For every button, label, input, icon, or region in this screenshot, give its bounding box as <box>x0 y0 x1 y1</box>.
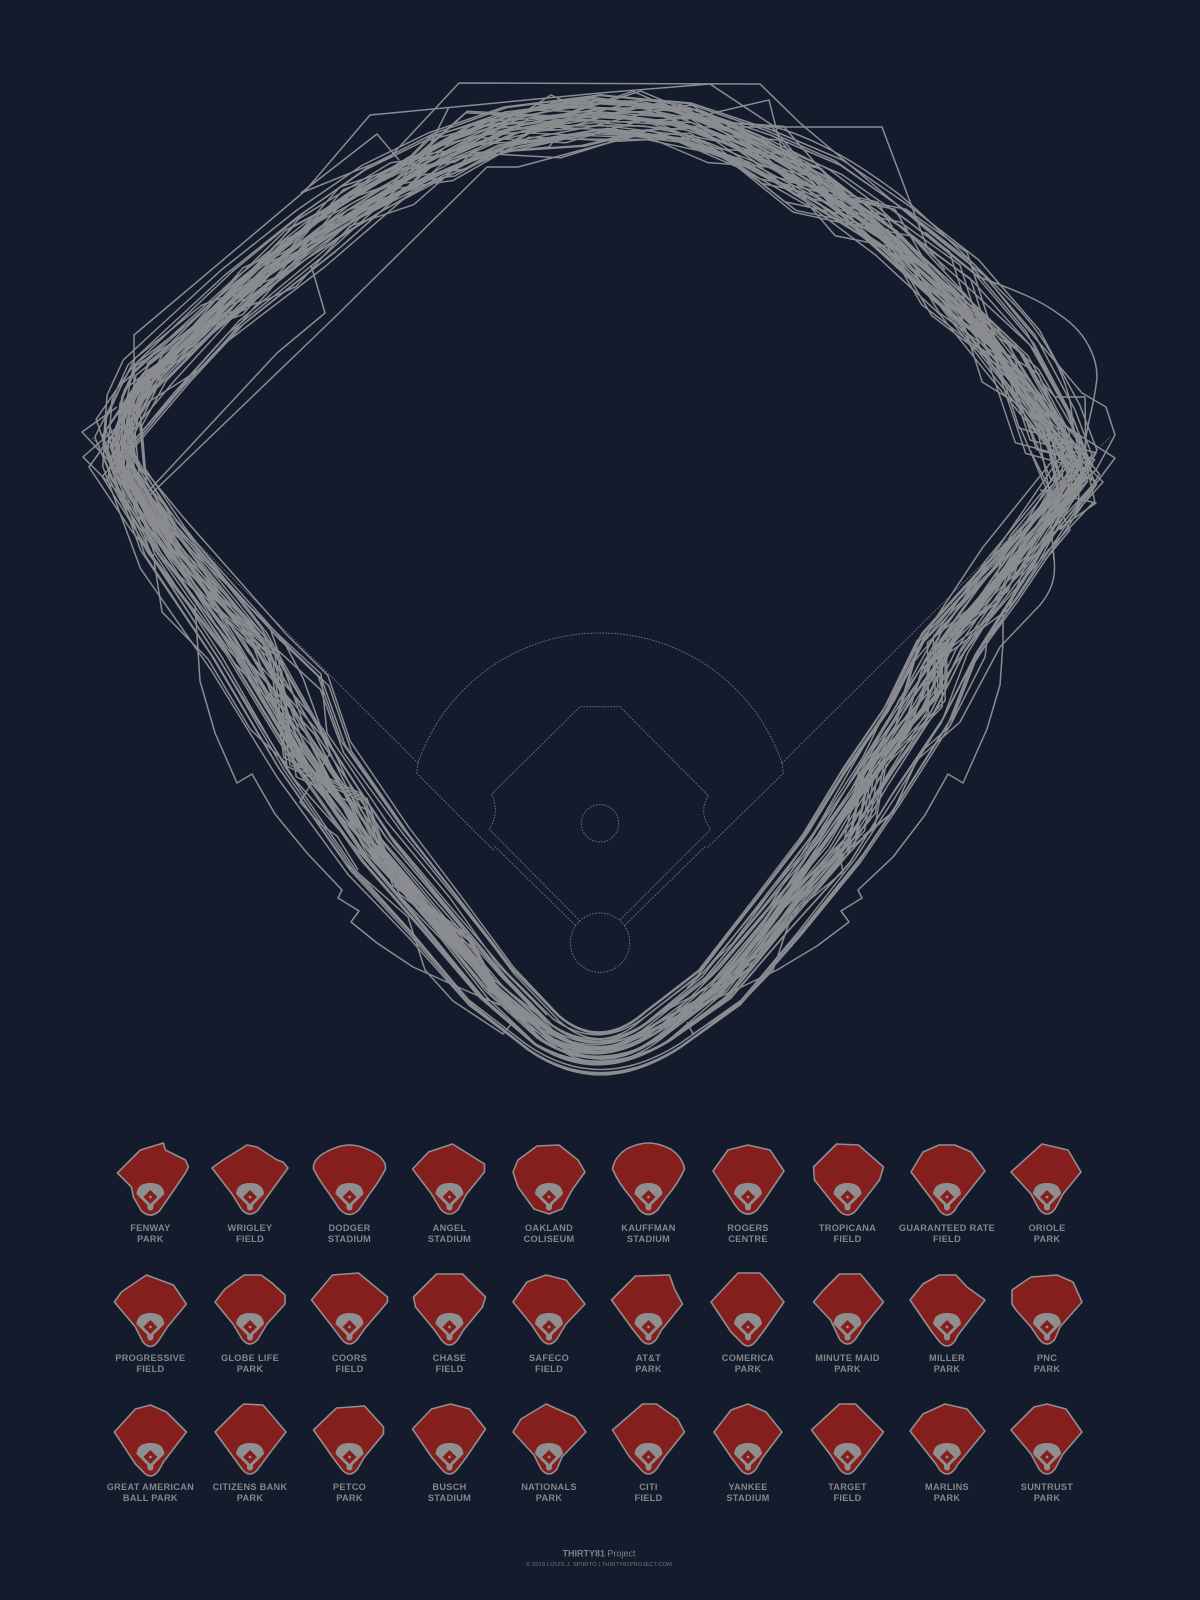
park: Wrigley Field <box>212 1145 288 1244</box>
park: Progressive Field: PROGRESSIVE <box>115 1353 185 1363</box>
park: Citizens Bank Park: CITIZENS BANK <box>213 1482 287 1492</box>
park: Yankee Stadium: YANKEE <box>728 1482 768 1492</box>
park: Guaranteed Rate Field <box>899 1145 995 1244</box>
park: Rogers Centre <box>713 1145 784 1244</box>
park: Chase Field <box>414 1274 486 1374</box>
park: Citi Field: CITI <box>639 1482 658 1492</box>
park: Coors Field: COORS <box>332 1353 367 1363</box>
park: SunTrust Park <box>1011 1404 1082 1503</box>
park: Citi Field <box>612 1404 684 1503</box>
park: Miller Park: PARK <box>934 1364 960 1374</box>
park: Nationals Park: PARK <box>536 1493 562 1503</box>
footer credit: THIRTY81 Project <box>562 1548 636 1558</box>
park: Tropicana Field: TROPICANA <box>819 1223 876 1233</box>
park: Kauffman Stadium <box>612 1143 684 1244</box>
park: Guaranteed Rate Field: FIELD <box>933 1234 961 1244</box>
park: Tropicana Field <box>814 1144 884 1244</box>
park: SunTrust Park: PARK <box>1034 1493 1060 1503</box>
park: Dodger Stadium: STADIUM <box>328 1234 371 1244</box>
park: Minute Maid Park: MINUTE MAID <box>815 1353 880 1363</box>
park: SunTrust Park: SUNTRUST <box>1021 1482 1073 1492</box>
park: Marlins Park <box>910 1404 985 1503</box>
park: Miller Park: MILLER <box>929 1353 965 1363</box>
park: Comerica Park: PARK <box>735 1364 761 1374</box>
park: Fenway Park: FENWAY <box>130 1223 171 1233</box>
park: Comerica Park <box>711 1273 784 1374</box>
outfield grass arc and foul territory edge <box>417 633 783 850</box>
park: AT&T Park: PARK <box>635 1364 662 1374</box>
park: Coors Field: FIELD <box>335 1364 364 1374</box>
park: Globe Life Park: GLOBE LIFE <box>221 1353 279 1363</box>
park: Minute Maid Park <box>814 1274 884 1374</box>
park: Kauffman Stadium: STADIUM <box>627 1234 670 1244</box>
park: Citi Field: FIELD <box>634 1493 663 1503</box>
park: Petco Park: PARK <box>336 1493 363 1503</box>
park: Safeco Field: FIELD <box>535 1364 563 1374</box>
overlaid outfield wall outlines of all ballparks <box>82 83 1115 1076</box>
park: Minute Maid Park: PARK <box>834 1364 861 1374</box>
park: Citizens Bank Park <box>213 1404 287 1503</box>
park: Target Field: TARGET <box>828 1482 867 1492</box>
park: Nationals Park <box>513 1404 586 1503</box>
park: Rogers Centre: CENTRE <box>728 1234 768 1244</box>
park: Busch Stadium: BUSCH <box>432 1482 467 1492</box>
park: Miller Park <box>910 1275 985 1374</box>
park: Kauffman Stadium: KAUFFMAN <box>621 1223 676 1233</box>
park: Petco Park <box>314 1406 384 1503</box>
park: Coors Field <box>312 1273 388 1374</box>
park: Great American Ball Park <box>107 1405 194 1503</box>
right foul line <box>782 437 1110 763</box>
park: Guaranteed Rate Field: GUARANTEED RATE <box>899 1223 995 1233</box>
home plate circle <box>570 913 630 972</box>
park: Busch Stadium <box>412 1404 486 1503</box>
park: Oriole Park: PARK <box>1034 1234 1060 1244</box>
park: Oriole Park <box>1011 1144 1081 1244</box>
park: Globe Life Park: PARK <box>237 1364 263 1374</box>
park: Globe Life Park <box>215 1275 285 1374</box>
park: Wrigley Field: FIELD <box>236 1234 264 1244</box>
park: Yankee Stadium <box>714 1404 782 1503</box>
outlier walls <box>134 84 775 420</box>
park: Great American Ball Park: GREAT AMERICAN <box>107 1482 194 1492</box>
park: Target Field <box>812 1404 884 1503</box>
park: Nationals Park: NATIONALS <box>521 1482 577 1492</box>
park: Oakland Coliseum: COLISEUM <box>524 1234 574 1244</box>
park: Oriole Park: ORIOLE <box>1028 1223 1066 1233</box>
park: Chase Field: CHASE <box>433 1353 466 1363</box>
left foul line <box>91 437 418 763</box>
park: Rogers Centre: ROGERS <box>727 1223 769 1233</box>
park: PNC Park <box>1012 1275 1082 1374</box>
park: Dodger Stadium <box>313 1145 386 1244</box>
park: Busch Stadium: STADIUM <box>428 1493 471 1503</box>
infield diagram (dotted) <box>91 437 1110 972</box>
park: Oakland Coliseum <box>513 1145 585 1244</box>
park: PNC Park: PARK <box>1034 1364 1060 1374</box>
park: Safeco Field: SAFECO <box>529 1353 569 1363</box>
park: Oakland Coliseum: OAKLAND <box>525 1223 573 1233</box>
footer credit: © 2018 LOUIS J. SPIRITO | THIRTY81PROJECT.COM <box>526 1561 672 1568</box>
park: Chase Field: FIELD <box>435 1364 464 1374</box>
park: Angel Stadium <box>412 1144 484 1244</box>
pitcher's mound <box>581 805 619 842</box>
park: AT&T Park: AT&T <box>636 1353 661 1363</box>
park: Progressive Field <box>114 1275 186 1374</box>
park: PNC Park: PNC <box>1037 1353 1057 1363</box>
park: Marlins Park: PARK <box>934 1493 960 1503</box>
park: Fenway Park <box>117 1143 188 1244</box>
park: Fenway Park: PARK <box>137 1234 164 1244</box>
park: Progressive Field: FIELD <box>136 1364 164 1374</box>
park: Citizens Bank Park: PARK <box>237 1493 263 1503</box>
park: Dodger Stadium: DODGER <box>328 1223 371 1233</box>
baselines <box>495 847 705 925</box>
park: Petco Park: PETCO <box>333 1482 366 1492</box>
park: Marlins Park: MARLINS <box>925 1482 969 1492</box>
park: AT&T Park <box>612 1275 682 1374</box>
park: Great American Ball Park: BALL PARK <box>123 1493 178 1503</box>
park: Angel Stadium: ANGEL <box>433 1223 466 1233</box>
park: Wrigley Field: WRIGLEY <box>228 1223 272 1233</box>
park: Target Field: FIELD <box>833 1493 862 1503</box>
park: Tropicana Field: FIELD <box>833 1234 862 1244</box>
park: Safeco Field <box>513 1275 585 1374</box>
park: Angel Stadium: STADIUM <box>428 1234 471 1244</box>
infield dirt <box>489 707 711 921</box>
park: Yankee Stadium: STADIUM <box>726 1493 770 1503</box>
footer credit <box>526 1548 672 1568</box>
park: Comerica Park: COMERICA <box>722 1353 774 1363</box>
